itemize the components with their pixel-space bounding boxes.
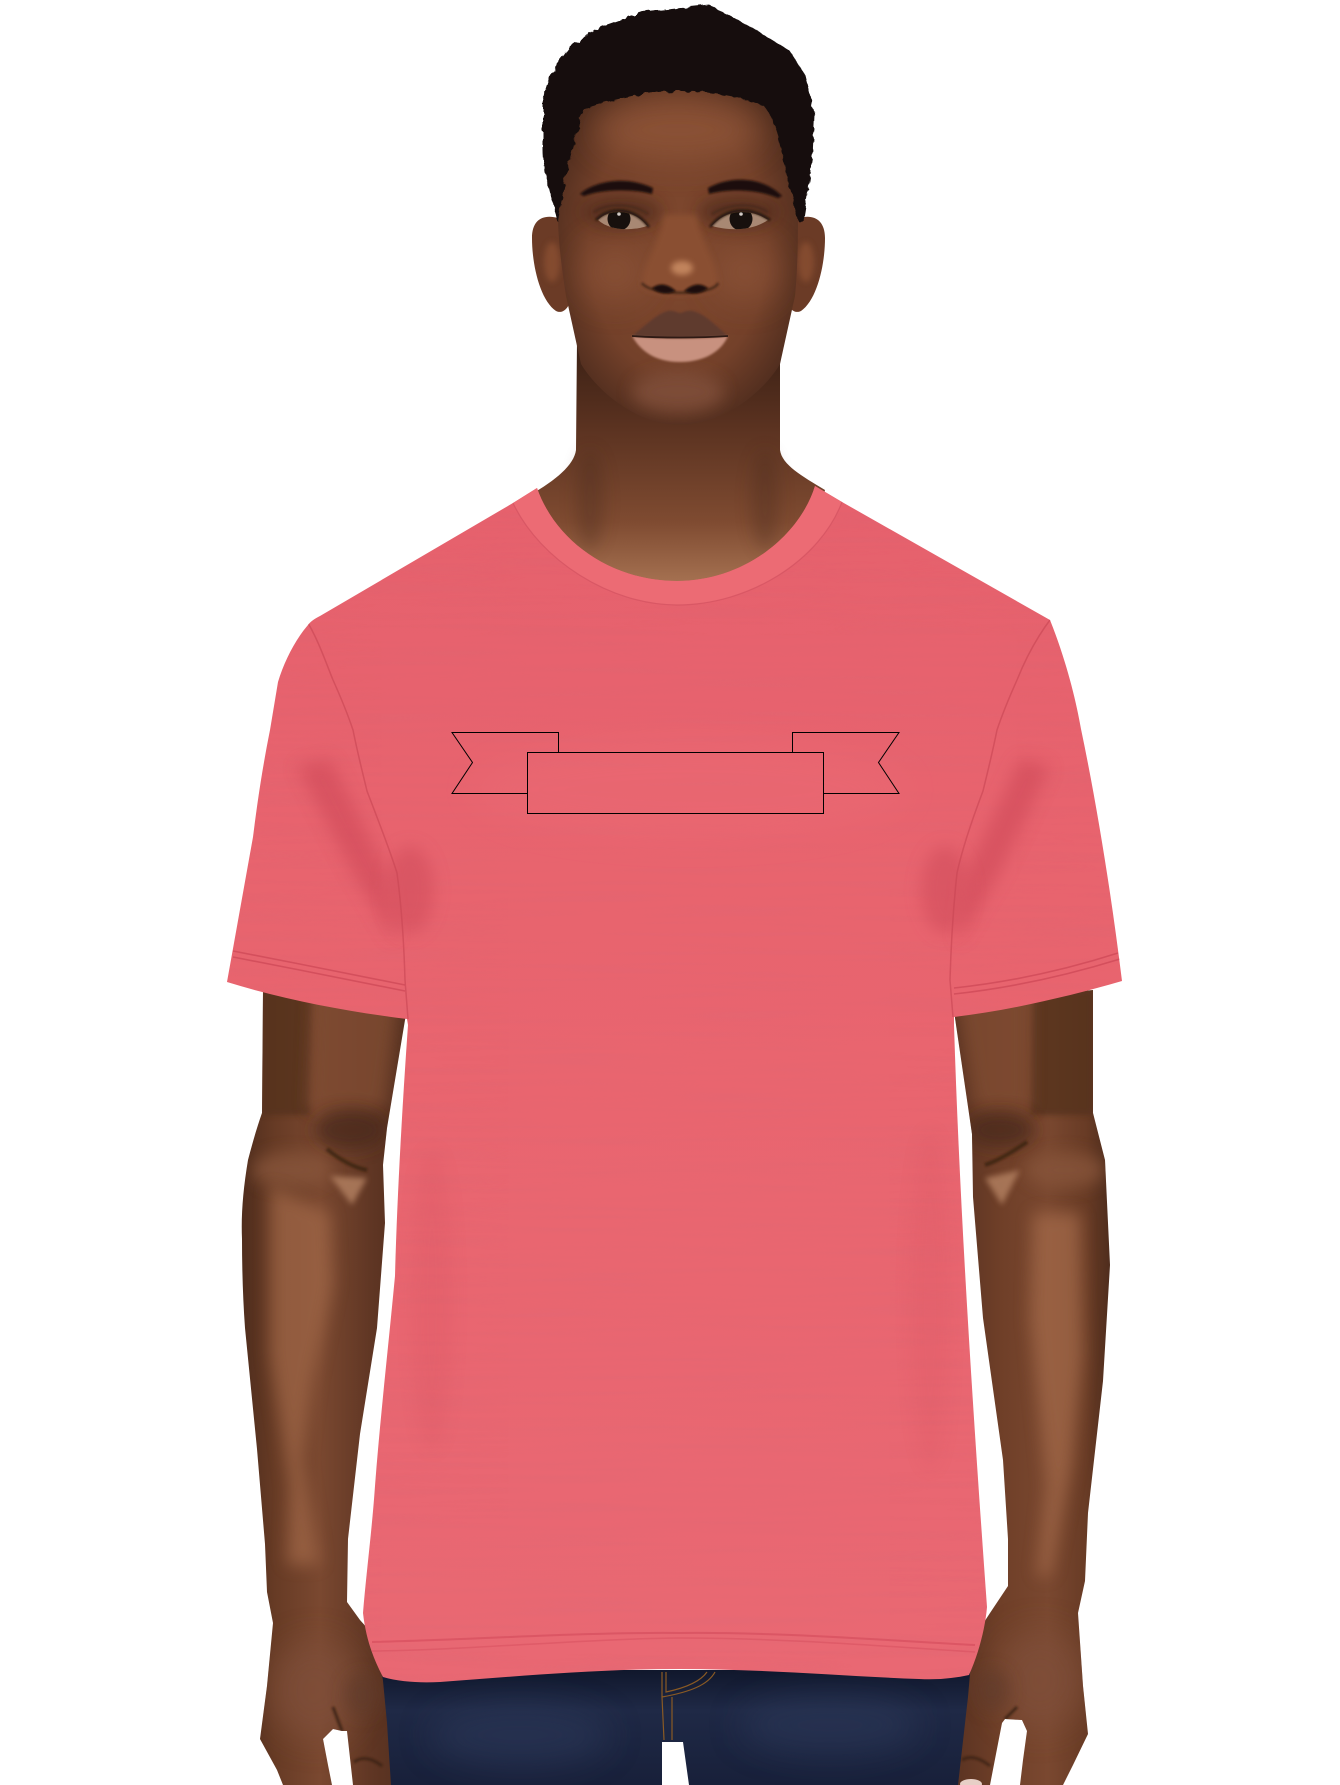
left sleeve fold shadow [303, 762, 387, 920]
body hem stitch [372, 1633, 975, 1645]
hair [543, 5, 815, 221]
t-shirt mockup figure [227, 4, 1122, 1785]
lips [632, 311, 728, 362]
nose [642, 215, 718, 295]
right sleeve seam [950, 620, 1050, 1017]
right ear [785, 217, 825, 312]
left arm and hand [242, 990, 408, 1785]
right eyebrow [708, 180, 782, 198]
left underarm shadow [390, 850, 432, 930]
left sleeve seam [308, 623, 408, 1019]
t-shirt [227, 486, 1127, 1682]
fingernail [960, 1779, 982, 1785]
left eyebrow [580, 181, 653, 196]
right ribbon tail [792, 732, 899, 794]
banner center panel [528, 752, 824, 814]
face [558, 83, 798, 425]
right underarm shadow [922, 850, 963, 930]
collar band [513, 486, 842, 605]
left sleeve hem stitch [233, 951, 405, 991]
jeans fly stitching [662, 1672, 715, 1740]
right arm and hand [954, 990, 1110, 1785]
left ear [532, 217, 572, 312]
left ribbon tail [452, 732, 558, 794]
right sleeve fold shadow [966, 762, 1044, 919]
jeans [376, 1670, 978, 1785]
right eye [710, 205, 770, 230]
ribbon banner outline [452, 732, 899, 814]
left eye [594, 205, 649, 230]
right sleeve hem stitch [954, 953, 1120, 994]
neck [530, 340, 825, 600]
